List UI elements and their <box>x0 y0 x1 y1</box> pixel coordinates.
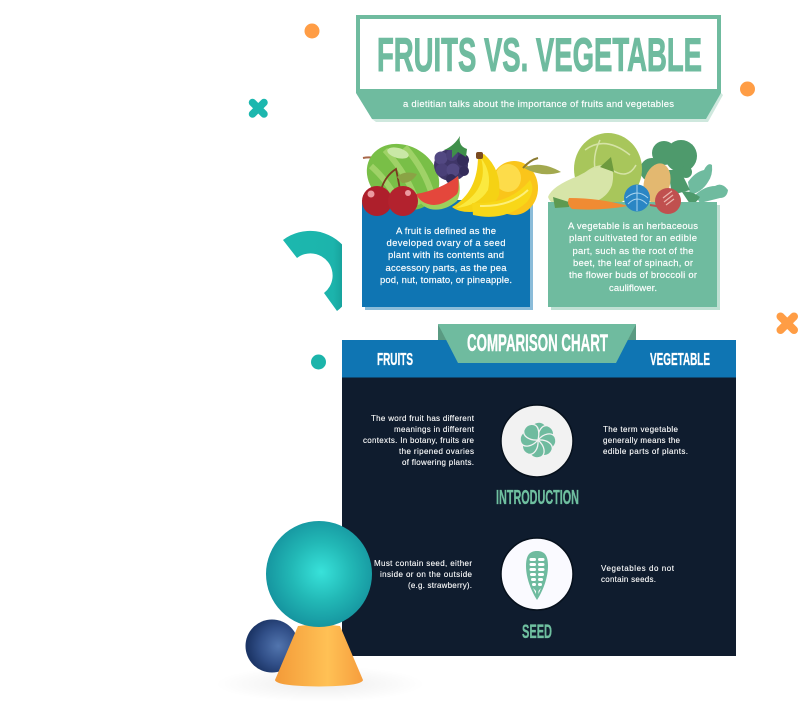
beet <box>650 188 681 214</box>
decor: orange dot top <box>304 24 320 38</box>
row: introduction <box>363 405 688 509</box>
fruits seed text: inside or on the outside <box>380 570 473 579</box>
vegetable text: A vegetable is an herbaceous <box>568 221 698 232</box>
vegetable introduction text: generally means the <box>603 436 681 445</box>
fruits introduction text: The word fruit has different <box>371 414 475 423</box>
potato <box>639 160 675 206</box>
3D shapes: sphere, ball and cone <box>215 521 425 702</box>
comparison chart heading: COMPARISON CHART <box>467 330 608 357</box>
fruit text: A fruit is defined as the <box>396 226 496 237</box>
vegetable introduction text: edible parts of plants. <box>603 447 688 456</box>
panel: fruits <box>354 131 561 310</box>
fruit text: pod, nut, tomato, or pineapple. <box>380 275 512 286</box>
panel: comparison chart <box>342 324 736 656</box>
teal sphere <box>266 521 372 627</box>
cherries <box>362 169 418 216</box>
fruit text: plant with its contents and <box>388 250 504 261</box>
fruits introduction text <box>363 414 475 467</box>
decor: orange cross <box>780 316 794 330</box>
column heading: fruits: FRUITS <box>377 349 413 369</box>
ribbon folds <box>438 324 636 340</box>
decor: teal cross <box>252 102 264 114</box>
fruits introduction text: the ripened ovaries <box>399 447 474 456</box>
navy ball <box>246 620 298 672</box>
card <box>548 202 717 307</box>
fruit illustration <box>354 131 561 223</box>
vegetable introduction text <box>603 425 688 456</box>
watermelon slice <box>416 176 460 210</box>
decor: teal dot <box>311 354 326 370</box>
vegetable text: part, such as the root of the <box>572 246 694 257</box>
column heading: vegetable: VEGETABLE <box>650 349 710 369</box>
lettuce <box>574 133 642 205</box>
vegetable seed text: Vegetables do not <box>601 564 675 573</box>
vegetable seed text <box>601 564 675 584</box>
subtitle: a dietitian talks about the importance of fruits and vegetables <box>403 99 674 110</box>
decor: teal arc <box>283 230 342 311</box>
carrot <box>553 197 628 210</box>
infographic canvas <box>246 15 798 694</box>
onion <box>624 184 650 212</box>
fruits seed text: (e.g. strawberry). <box>408 581 472 590</box>
ground shadow <box>215 666 425 702</box>
vegetable text: cauliflower. <box>609 283 657 294</box>
fruits seed text <box>374 559 473 590</box>
fruit text: accessory parts, as the pea <box>386 263 507 274</box>
row: seed <box>374 538 675 643</box>
broccoli <box>640 140 697 195</box>
watermelon <box>354 131 452 223</box>
vegetable introduction text: The term vegetable <box>603 425 679 434</box>
ribbon <box>438 324 636 363</box>
vegetable illustration <box>548 133 728 307</box>
vegetable text: plant cultivated for an edible <box>569 233 697 244</box>
title banner <box>356 17 723 122</box>
icon: corn seed in circle <box>501 538 573 610</box>
fruits seed text: Must contain seed, either <box>374 559 472 568</box>
introduction label: INTRODUCTION <box>496 487 579 509</box>
zucchini <box>548 157 614 207</box>
seed label: SEED <box>522 622 552 643</box>
decor: orange dot right <box>740 82 755 96</box>
bananas <box>452 152 532 217</box>
fruits introduction text: contexts. In botany, fruits are <box>363 436 475 445</box>
side leaves <box>682 164 728 204</box>
fruits introduction text: meanings in different <box>394 425 475 434</box>
orange cone <box>275 624 363 686</box>
fruit text <box>380 226 512 286</box>
blackberry <box>434 136 469 184</box>
vegetable text: the flower buds of broccoli or <box>569 270 697 281</box>
panel: vegetables <box>548 133 728 310</box>
vegetable text <box>568 221 698 294</box>
vegetable text: beet, the leaf of spinach, or <box>573 258 693 269</box>
lemon <box>490 158 561 215</box>
vegetable seed text: contain seeds. <box>601 575 656 584</box>
icon: flower in circle <box>501 405 573 477</box>
fruit text: developed ovary of a seed <box>386 238 506 249</box>
fruits introduction text: of flowering plants. <box>402 458 474 467</box>
